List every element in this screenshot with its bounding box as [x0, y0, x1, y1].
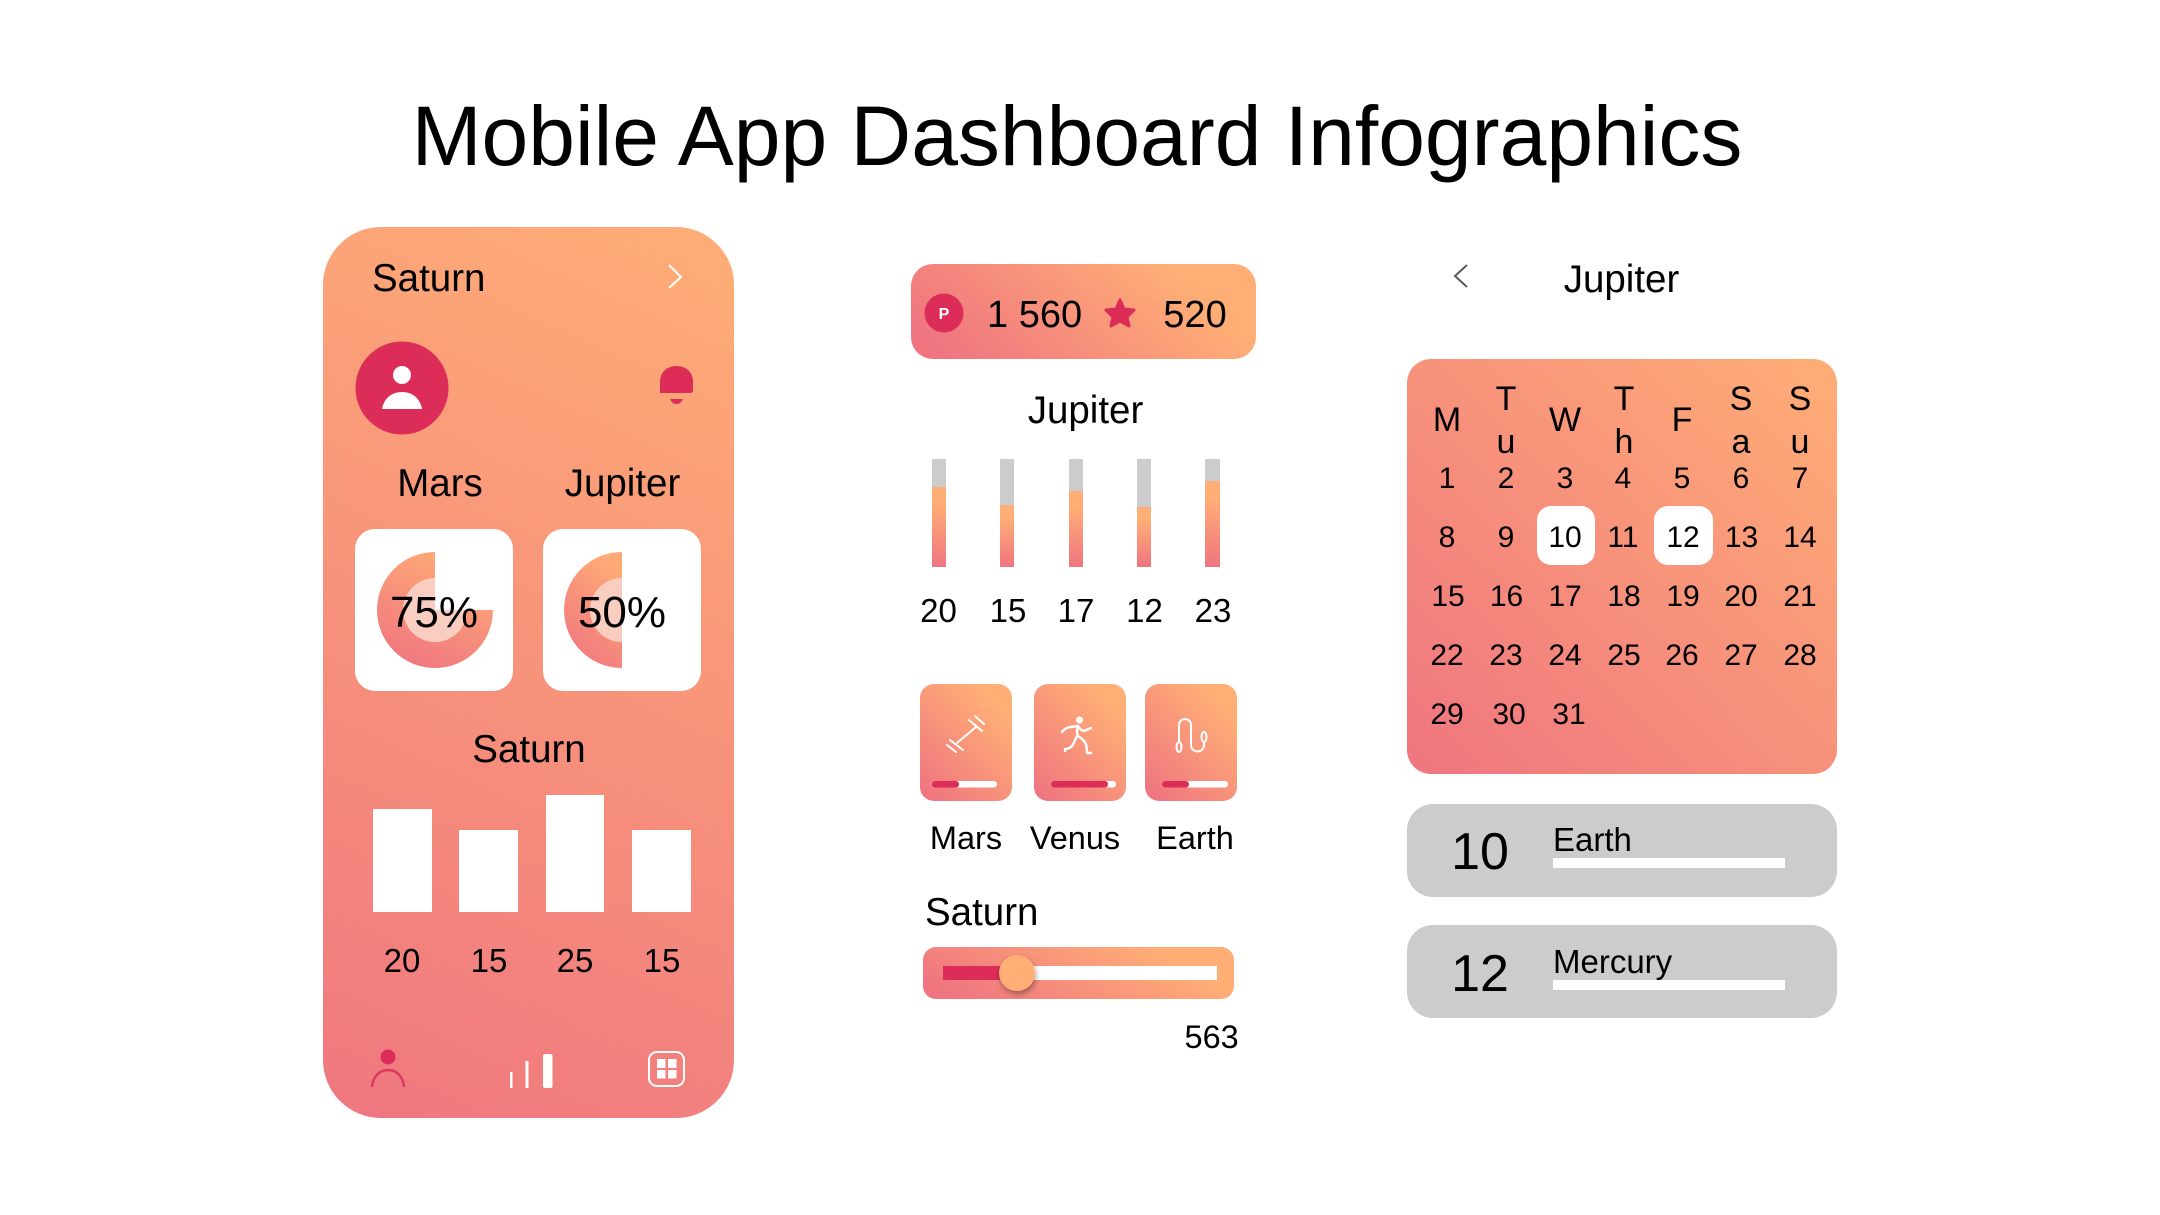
weekday headers: T [1614, 380, 1634, 418]
dates: 2 [1498, 462, 1514, 495]
label: Mars: Mars [397, 462, 483, 505]
dates: 8 [1439, 521, 1455, 554]
card: Venus runner [1034, 684, 1126, 801]
panel: Jupiter progress columns [920, 389, 1231, 629]
weekday headers: S [1730, 380, 1752, 418]
panel: event Mercury [1407, 925, 1837, 1018]
column 23: 23 [1195, 592, 1231, 629]
panel: event Earth: Earth [1553, 821, 1632, 858]
panel: points pill [911, 264, 1256, 359]
dates: 22 [1430, 639, 1464, 672]
dates: 13 [1725, 521, 1758, 554]
dates: 17 [1548, 580, 1582, 613]
icon: user avatar [356, 342, 448, 434]
weekday headers: u [1497, 423, 1515, 461]
dates: 15 [1431, 580, 1465, 613]
dates: 9 [1498, 521, 1514, 554]
icon: P coin [924, 294, 964, 332]
icon: nav stats [510, 1054, 552, 1088]
icon: back chevron [1455, 265, 1467, 287]
card: Mars 75 percent donut: 75% [390, 588, 478, 637]
icon: nav grid [649, 1052, 684, 1086]
column 12: 12 [1126, 592, 1163, 629]
panel: event Mercury: 12 [1451, 945, 1509, 1003]
card: Mars 75 percent donut [355, 529, 513, 691]
dates: 1 [1439, 462, 1455, 495]
weekday headers: W [1549, 401, 1581, 439]
dates: 12 [1666, 521, 1700, 554]
column 15 [990, 459, 1026, 629]
weekday headers: T [1496, 380, 1516, 418]
dates [1430, 462, 1817, 731]
panel: phone dashboard [323, 227, 734, 1118]
panel: activity cards [920, 684, 1237, 856]
bar chart: Saturn: 15 [471, 942, 507, 979]
phone header text: Saturn [372, 257, 485, 300]
dates: 10 [1548, 521, 1582, 554]
icon: star [1106, 300, 1134, 326]
dates: 7 [1792, 462, 1808, 495]
slider track [923, 947, 1234, 999]
weekday headers: F [1672, 401, 1692, 439]
dates: 28 [1783, 639, 1817, 672]
weekday headers: S [1789, 380, 1811, 418]
column 12 [1126, 459, 1163, 629]
highlighted date 10 [1537, 506, 1595, 565]
calendar heading: Jupiter [1564, 258, 1679, 301]
dates: 26 [1665, 639, 1699, 672]
column 23 [1195, 459, 1231, 629]
dates: 20 [1724, 580, 1758, 613]
calendar grid [1407, 359, 1837, 774]
panel: event Earth [1407, 804, 1837, 897]
panel: Saturn slider [923, 891, 1239, 1055]
card labels: Mars [930, 820, 1002, 856]
dates: 30 [1492, 698, 1526, 731]
card labels [930, 820, 1234, 856]
dates: 5 [1674, 462, 1690, 495]
dates: 14 [1783, 521, 1817, 554]
dates: 6 [1733, 462, 1749, 495]
icon: forward chevron [669, 265, 681, 288]
bar chart: Saturn: 25 [557, 942, 593, 979]
bar chart: Saturn [373, 795, 691, 979]
column 20 [920, 459, 957, 629]
title: Mobile App Dashboard Infographics [412, 89, 1742, 183]
icon: nav profile [372, 1050, 404, 1087]
dates: 16 [1490, 580, 1523, 613]
dates: 23 [1489, 639, 1523, 672]
dates: 21 [1783, 580, 1817, 613]
dates: 31 [1552, 698, 1586, 731]
heading: Jupiter [1028, 389, 1143, 432]
icon: notification bell [660, 366, 693, 404]
star value: 520 [1163, 294, 1227, 336]
weekday headers: a [1732, 423, 1751, 461]
bar chart: Saturn: 15 [644, 942, 680, 979]
card labels: Earth [1156, 820, 1234, 856]
card: Jupiter 50 percent donut: 50% [578, 588, 666, 637]
dates: 24 [1548, 639, 1582, 672]
slider value: 563 [1184, 1019, 1239, 1055]
column 20: 20 [920, 592, 957, 629]
points value: 1 560 [987, 294, 1082, 336]
phone background [323, 227, 734, 1118]
dates: 19 [1666, 580, 1700, 613]
highlighted date 12 [1654, 506, 1713, 565]
weekday headers: h [1615, 423, 1633, 461]
column 17 [1058, 459, 1094, 629]
column 17: 17 [1058, 592, 1094, 629]
dates: 29 [1430, 698, 1464, 731]
dates: 27 [1724, 639, 1758, 672]
heading: Saturn [925, 891, 1038, 934]
panel: Jupiter calendar [1407, 258, 1837, 774]
card: Earth jump rope [1145, 684, 1237, 801]
icon: P coin: P [939, 306, 950, 323]
weekday headers: M [1433, 401, 1461, 439]
card: Mars dumbbell [920, 684, 1012, 801]
weekday headers [1433, 380, 1811, 461]
bar chart heading: Saturn [472, 728, 586, 771]
weekday headers: u [1791, 423, 1809, 461]
label: Jupiter: Jupiter [565, 462, 680, 505]
dates: 18 [1607, 580, 1641, 613]
dates: 4 [1615, 462, 1631, 495]
column 15: 15 [990, 592, 1026, 629]
bar chart: Saturn: 20 [384, 942, 420, 979]
dates: 3 [1557, 462, 1573, 495]
dates: 11 [1607, 521, 1639, 554]
card labels: Venus [1030, 820, 1120, 856]
card: Jupiter 50 percent donut [543, 529, 701, 691]
panel: event Mercury: Mercury [1553, 943, 1673, 980]
dates: 25 [1607, 639, 1641, 672]
panel: event Earth: 10 [1451, 823, 1509, 881]
